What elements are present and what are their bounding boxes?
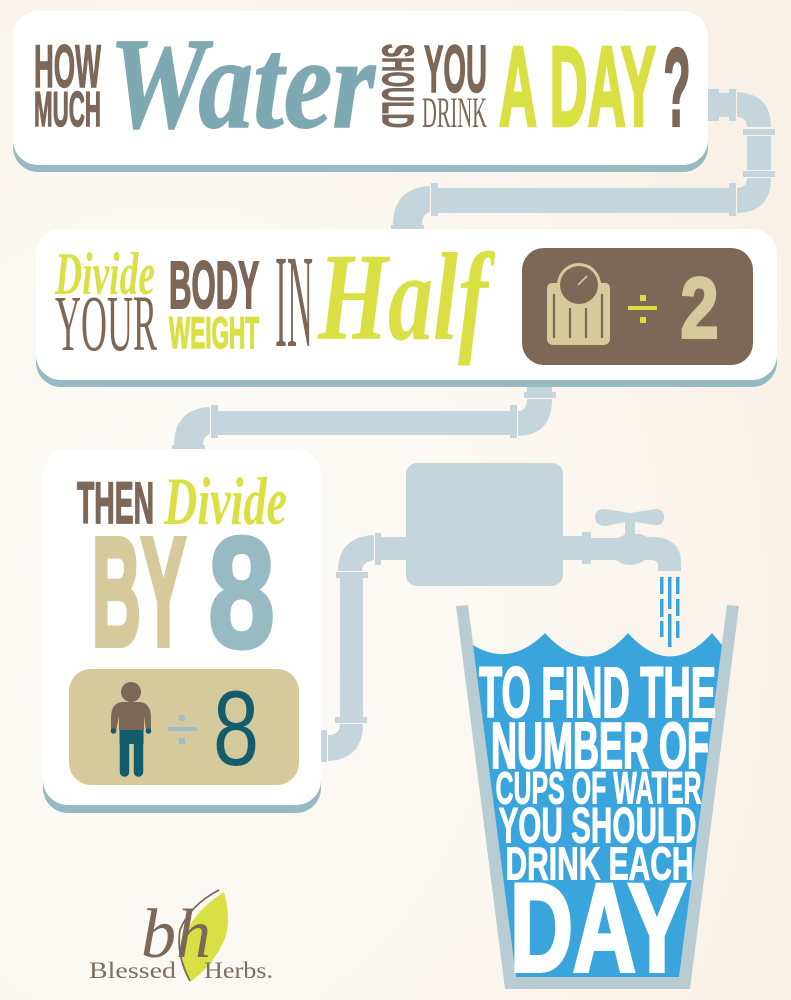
body weight card (36, 227, 777, 387)
title card: HOW (34, 32, 101, 100)
body weight card: YOUR (55, 281, 157, 368)
logo wordmark (89, 958, 273, 983)
tank (406, 463, 563, 586)
water fill (473, 633, 722, 977)
body weight card: BODY (169, 248, 259, 323)
heading: half: Half (317, 229, 495, 367)
icon: division sign (168, 715, 197, 744)
logo monogram: bh (141, 896, 211, 973)
heading: weight: WEIGHT (169, 309, 259, 358)
divide by 8 card: THEN (77, 471, 154, 536)
icon: leaf (182, 892, 228, 982)
logo wordmark: Herbs. (204, 958, 273, 983)
number: 2: 2 (680, 262, 718, 356)
title card: ? (664, 26, 690, 150)
heading: divide: Divide (163, 463, 287, 539)
pipe: title card to body weight card (391, 89, 775, 231)
divide by 8 card (43, 449, 321, 813)
glass text (479, 653, 716, 998)
divide by 8 card: BY (92, 506, 186, 678)
title: water: Water (109, 12, 376, 156)
title card: YOU (424, 32, 487, 107)
number: 8: 8 (213, 668, 259, 788)
heading: divide: Divide (54, 241, 155, 307)
body weight card: IN (275, 227, 313, 375)
title card: SHOULD (373, 44, 422, 128)
title card: DRINK (422, 90, 487, 137)
heading: 8: 8 (208, 505, 275, 681)
panel: person divided by 8 (69, 668, 299, 788)
glass text: DAY (510, 859, 686, 998)
faucet (563, 509, 681, 571)
glass of water (456, 605, 739, 998)
icon: division sign (628, 295, 657, 323)
icon: bathroom scale (547, 263, 610, 345)
icon: person (111, 682, 151, 772)
title card (13, 11, 708, 172)
pipe: body weight card to divide by 8 card (172, 385, 556, 450)
water stream (660, 577, 680, 647)
title card: MUCH (34, 83, 101, 137)
logo: blessed herbs (89, 890, 273, 983)
logo wordmark: Blessed (89, 958, 177, 983)
glass outline (456, 605, 739, 989)
title: how much (34, 32, 101, 137)
pipe: divide by 8 card to tank (321, 533, 411, 762)
glass text: DRINK EACH (506, 838, 694, 890)
panel: scale divided by 2 (522, 248, 753, 365)
